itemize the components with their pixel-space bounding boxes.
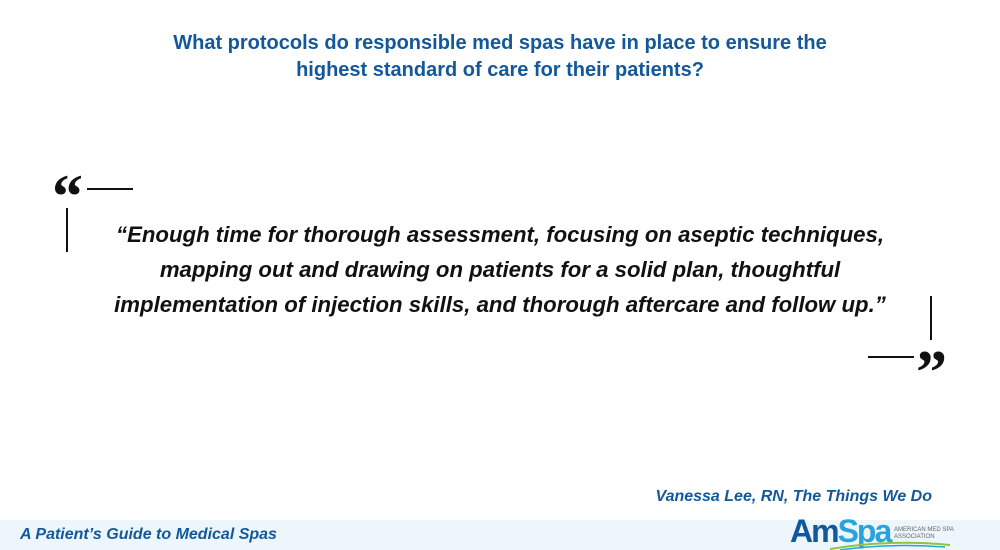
footer text: A Patient’s Guide to Medical Spas (20, 526, 277, 543)
icon: opening quote mark: “ (52, 163, 83, 231)
logo: AmSpa: AmSpa (790, 513, 890, 549)
quote text: mapping out and drawing on patients for a solid plan, thoughtful (160, 257, 840, 282)
title: highest standard of care for their patients? (296, 59, 704, 81)
footer band (0, 520, 1000, 550)
quote text (114, 222, 886, 317)
logo: AmSpa: ASSOCIATION (894, 534, 935, 540)
attribution: Vanessa Lee, RN, The Things We Do (655, 488, 932, 505)
quote text: implementation of injection skills, and thorough aftercare and follow up.” (114, 292, 886, 317)
title (173, 32, 827, 81)
quote text: “Enough time for thorough assessment, focusing on aseptic techniques, (116, 222, 884, 247)
logo: AmSpa: AMERICAN MED SPA (894, 527, 954, 533)
logo: AmSpa (790, 513, 954, 550)
icon: closing quote mark: ” (916, 339, 947, 407)
title: What protocols do responsible med spas have in place to ensure the (173, 32, 827, 54)
